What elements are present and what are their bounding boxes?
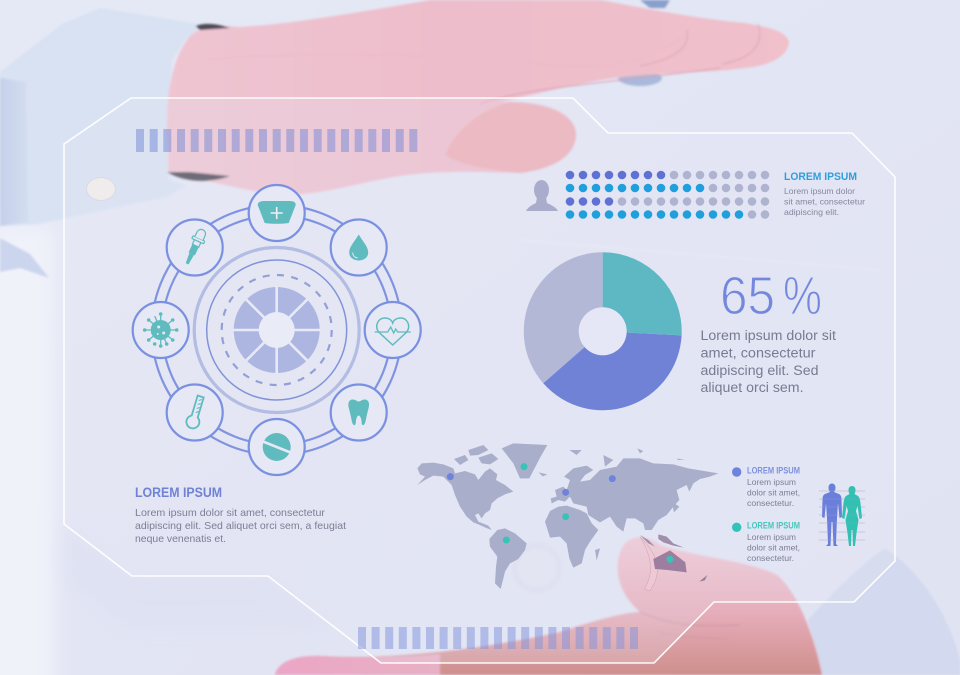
dot row 2: [566, 184, 769, 192]
text block: top right: Lorem ipsum dolor: [784, 186, 855, 196]
photo: left shirt cuff: [0, 0, 320, 278]
segment: blue: [543, 331, 682, 410]
text block: lower left: adipiscing elit. Sed aliquet orci sem, a feugiat: [135, 520, 346, 532]
heading: top right: LOREM IPSUM: [784, 171, 857, 183]
photo: shirt button: [618, 0, 670, 86]
dot row 1: [566, 171, 769, 179]
figure: woman: [842, 486, 862, 546]
icon: thermometer: [167, 384, 223, 440]
map: New Zealand over thumb: [699, 575, 707, 582]
central segmented wheel: [233, 286, 320, 374]
photo: cuff button: [86, 178, 116, 200]
icon: pill: [249, 419, 305, 475]
text block: donut description: aliquet orci sem.: [700, 380, 804, 395]
text block: top right: sit amet, consectetur: [784, 196, 865, 206]
dot row 4: [566, 210, 769, 219]
legend item: teal: Lorem ipsum: [747, 532, 796, 542]
legend item: blue: [732, 466, 800, 508]
donut chart: [524, 252, 682, 410]
legend item: blue: Lorem ipsum: [747, 477, 796, 487]
icon: virus: [133, 302, 189, 358]
heading: lower left: LOREM IPSUM: [135, 485, 222, 500]
dot matrix chart: [566, 171, 769, 219]
text block: lower left: [135, 485, 346, 545]
legend item: blue: LOREM IPSUM: [747, 466, 800, 476]
text block: top right: adipiscing elit.: [784, 207, 839, 217]
photo: right sleeve: [808, 548, 960, 675]
figure: man: [822, 484, 842, 546]
map markers: [447, 463, 673, 563]
legend item: teal: dolor sit amet,: [747, 542, 800, 552]
legend item: blue: dolor sit amet,: [747, 488, 800, 498]
map: Australia over thumb: [653, 550, 687, 572]
text block: donut description: Lorem ipsum dolor sit: [700, 328, 836, 343]
panel: HUD frame: [64, 98, 895, 663]
stat: 65 percent: %: [783, 266, 822, 326]
decorative bar strip: bottom: [358, 627, 638, 649]
text block: donut description: adipiscing elit. Sed: [700, 363, 818, 378]
icon: dropper: [167, 220, 223, 276]
text block: lower left: Lorem ipsum dolor sit amet, consectetur: [135, 507, 326, 519]
human body figures: [819, 484, 865, 546]
icon: tooth: [331, 384, 387, 440]
legend item: teal: consectetur.: [747, 553, 794, 563]
segment: teal: [603, 252, 682, 335]
continents: [417, 443, 718, 589]
dot row 3: [566, 197, 769, 206]
stat: 65 percent: 65: [720, 266, 775, 326]
legend item: blue: consectetur.: [747, 498, 794, 508]
inner concentric rings: [194, 248, 359, 412]
icon: nurse cap: [249, 185, 305, 241]
segment: grey: [524, 252, 603, 383]
photo: upper hand: [167, 0, 789, 195]
height scale lines: [819, 491, 865, 540]
photo: lower hand and thumb: [275, 537, 822, 675]
faint shirt button under map: [515, 546, 559, 590]
world map: [417, 443, 718, 591]
outer double ring: [152, 205, 402, 455]
icon: water drop: [331, 220, 387, 276]
icon: heart with pulse: [365, 302, 421, 358]
thumbnail nail on thumb: [640, 537, 657, 591]
text block: lower left: neque venenatis et.: [135, 533, 226, 545]
text block: donut description: [700, 328, 836, 395]
legend item: teal: [732, 520, 800, 563]
medical icon wheel: [133, 185, 421, 475]
legend item: teal: LOREM IPSUM: [747, 520, 800, 530]
icon: person silhouette: [526, 180, 558, 211]
text block: top right: [784, 171, 865, 217]
decorative bar strip: top: [136, 129, 417, 152]
text block: donut description: amet, consectetur: [700, 346, 816, 360]
